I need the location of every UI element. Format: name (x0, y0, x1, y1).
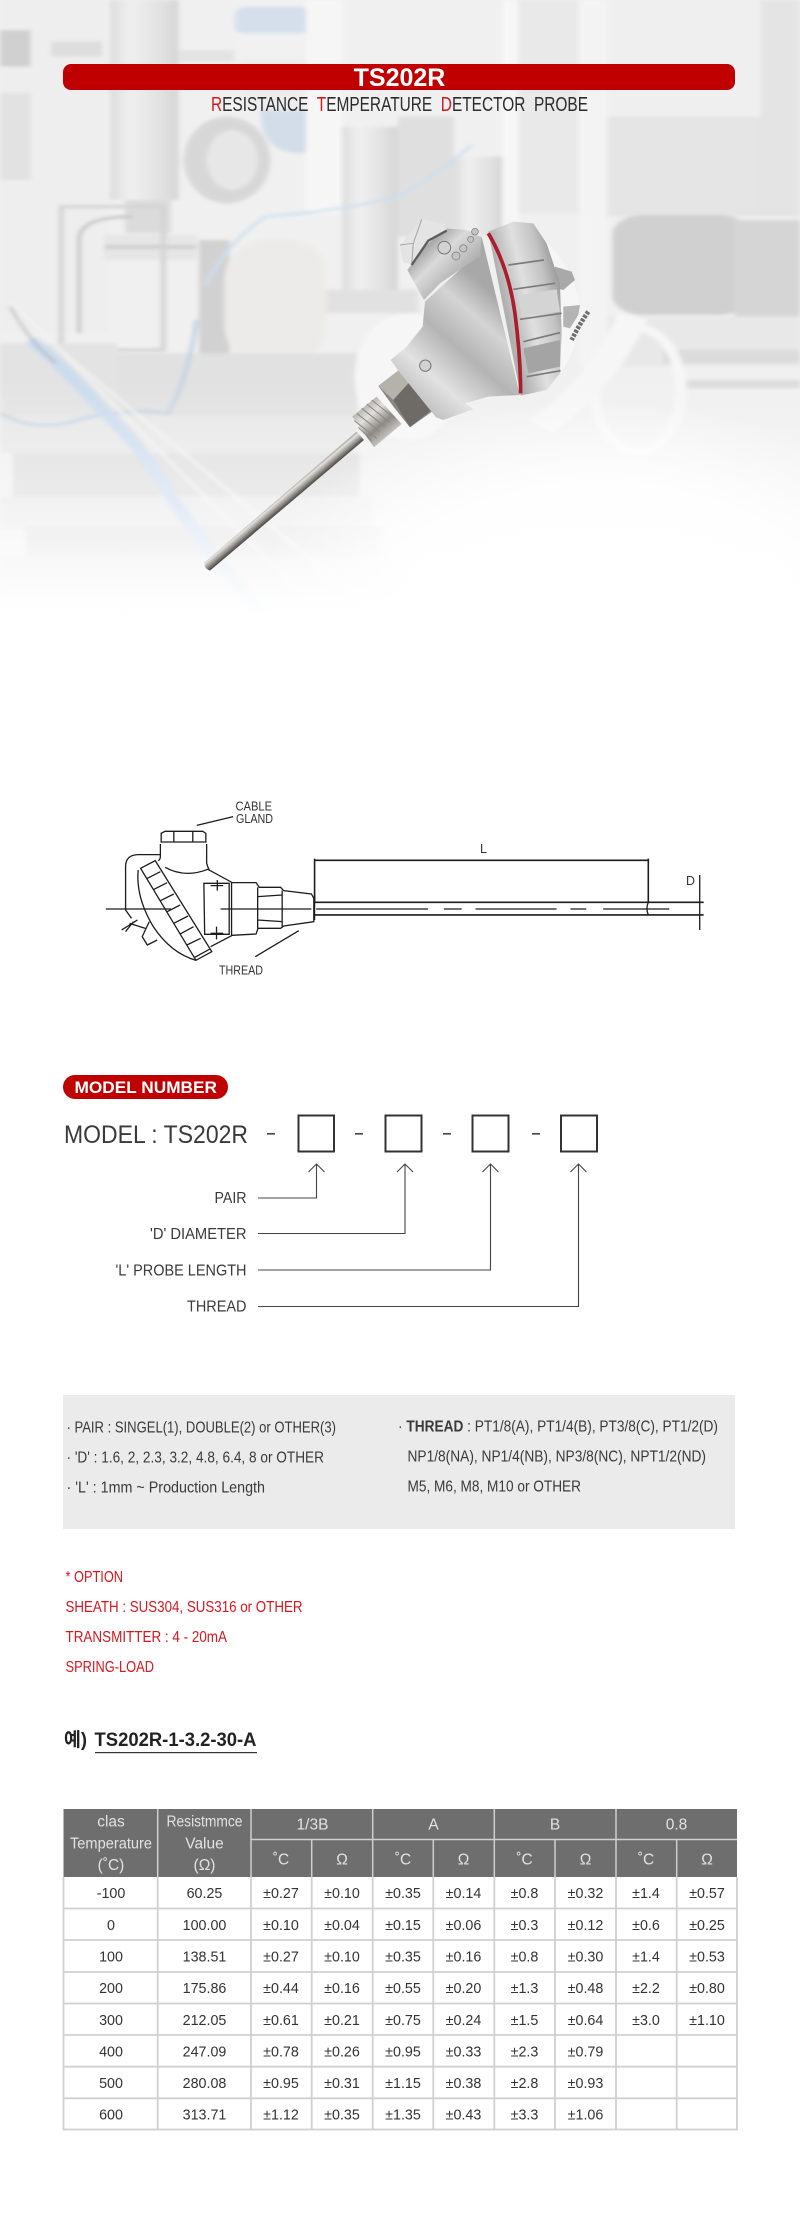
table header: A (428, 1816, 439, 1834)
option notes: TRANSMITTER : 4 - 20mA (66, 1629, 227, 1646)
red o-ring (488, 233, 521, 393)
option notes: * OPTION (66, 1569, 123, 1586)
white dome and terminal tabs (530, 237, 588, 380)
row 0: ±0.04 (324, 1918, 360, 1934)
row -100: ±0.8 (511, 1886, 538, 1902)
row 0: ±0.10 (263, 1918, 299, 1934)
row 400: ±2.3 (511, 2044, 538, 2060)
option notes: SPRING-LOAD (66, 1659, 154, 1676)
arrow: probe length (258, 1164, 498, 1270)
row 100: 138.51 (183, 1950, 226, 1966)
table header: B (550, 1816, 560, 1834)
left codes: · 'D' : 1.6, 2, 2.3, 3.2, 4.8, 6.4, 8 or OTHER (66, 1450, 324, 1466)
row 200: ±0.44 (263, 1981, 299, 1997)
row 300: ±0.24 (446, 2013, 481, 2029)
row 600: ±1.12 (263, 2108, 299, 2124)
row 300: ±0.21 (324, 2013, 360, 2029)
row 300: ±3.0 (632, 2013, 660, 2029)
left codes: · 'L' : 1mm ~ Production Length (66, 1480, 265, 1496)
row 300: 300 (99, 2013, 123, 2029)
row -100: 60.25 (187, 1886, 222, 1902)
row 200: 175.86 (183, 1981, 226, 1997)
row 600: ±0.43 (446, 2108, 481, 2124)
row 500: ±1.15 (385, 2076, 421, 2092)
center line (106, 908, 669, 910)
drawing labels: D (686, 873, 695, 888)
thread codes: · THREAD : PT1/8(A), PT1/4(B), PT3/8(C), PT1/2(D) (398, 1418, 718, 1436)
row 100 (99, 1950, 725, 1966)
table header: ˚C (273, 1852, 289, 1868)
row -100: ±0.10 (324, 1886, 360, 1902)
housing outline (126, 855, 314, 960)
model code line: MODEL : TS202R (64, 1121, 248, 1149)
screws (211, 880, 223, 939)
row 400: ±0.78 (263, 2044, 299, 2060)
row 200 (99, 1981, 725, 1997)
row 100: ±0.10 (324, 1950, 360, 1966)
row 200: 200 (99, 1981, 123, 1997)
row 600: ±1.06 (568, 2108, 603, 2124)
drawing labels: L (480, 841, 487, 856)
row 100: ±0.27 (263, 1950, 299, 1966)
drawing labels: THREAD (219, 962, 263, 978)
drawing labels: CABLE (236, 798, 272, 814)
row 200: ±1.3 (511, 1981, 538, 1997)
row 100: ±0.35 (385, 1950, 421, 1966)
row 0: ±0.3 (511, 1918, 538, 1934)
row 400: ±0.95 (385, 2044, 421, 2060)
model field labels: THREAD (187, 1298, 246, 1316)
row 300: ±0.64 (568, 2013, 603, 2029)
example model number: 예) (64, 1729, 87, 1751)
row 400: 247.09 (183, 2044, 226, 2060)
table header: (Ω) (194, 1857, 215, 1874)
row 400: ±0.79 (568, 2044, 603, 2060)
example model number: TS202R-1-3.2-30-A (94, 1730, 257, 1751)
row -100: ±1.4 (632, 1886, 660, 1902)
dimension drawing (106, 798, 704, 978)
table header: Value (185, 1836, 224, 1852)
model field labels: 'L' PROBE LENGTH (116, 1262, 246, 1280)
hex nut (378, 371, 437, 427)
row 500: ±0.31 (324, 2076, 360, 2092)
row 500 (99, 2076, 603, 2092)
diameter dimension (699, 875, 701, 930)
left codes: · PAIR : SINGEL(1), DOUBLE(2) or OTHER(3) (66, 1420, 336, 1436)
row 500: ±2.8 (511, 2076, 538, 2092)
row 600: ±3.3 (511, 2108, 538, 2124)
row 300: ±1.5 (511, 2013, 538, 2029)
row 600 (99, 2108, 603, 2124)
table header: Temperature (70, 1836, 152, 1852)
row 500: ±0.95 (263, 2076, 299, 2092)
row 0: ±0.6 (632, 1918, 660, 1934)
row 500: 500 (99, 2076, 123, 2092)
row 300: 212.05 (183, 2013, 226, 2029)
screws (420, 241, 451, 371)
row 500: ±0.93 (568, 2076, 603, 2092)
product photo: RTD probe with head (204, 219, 588, 571)
chain beads (452, 228, 478, 260)
table header: Resistmmce (166, 1814, 242, 1830)
thread codes: NP1/8(NA), NP1/4(NB), NP3/8(NC), NPT1/2(ND) (408, 1448, 706, 1466)
title bar: TS202R (354, 64, 445, 92)
option notes: SHEATH : SUS304, SUS316 or OTHER (66, 1599, 302, 1616)
model field labels (116, 1190, 246, 1316)
cable gland (400, 219, 482, 300)
table header: Ω (701, 1852, 713, 1868)
probe sheath (315, 902, 704, 915)
arrow: pair (258, 1164, 324, 1198)
row 500: ±0.38 (446, 2076, 481, 2092)
hero background: factory photo (0, 0, 800, 780)
leaders (197, 817, 299, 957)
thread codes: M5, M6, M8, M10 or OTHER (408, 1478, 581, 1496)
row 200: ±0.20 (446, 1981, 481, 1997)
row 400: ±0.33 (446, 2044, 481, 2060)
table header: Ω (580, 1852, 591, 1868)
subtitle: RESISTANCE TEMPERATURE DETECTOR PROBE (211, 94, 588, 116)
row 300: ±0.75 (385, 2013, 421, 2029)
row 0: ±0.25 (689, 1918, 725, 1934)
row 200: ±0.16 (324, 1981, 360, 1997)
row 0: ±0.15 (385, 1918, 421, 1934)
sheath rod (204, 432, 364, 571)
row -100: ±0.32 (568, 1886, 603, 1902)
title bar (63, 64, 735, 92)
row 300 (99, 2013, 725, 2029)
model field labels: 'D' DIAMETER (150, 1226, 246, 1243)
drawing labels: GLAND (236, 811, 273, 826)
row 100: ±1.4 (632, 1950, 660, 1966)
thread codes (398, 1418, 718, 1496)
table header: ˚C (395, 1852, 411, 1868)
left codes (66, 1420, 336, 1496)
table header: Ω (336, 1852, 348, 1868)
row 100: ±0.8 (511, 1950, 538, 1966)
model number badge: MODEL NUMBER (74, 1078, 217, 1097)
row 400: 400 (99, 2044, 123, 2060)
model code line (64, 1116, 597, 1152)
row 0: ±0.06 (446, 1918, 481, 1934)
table header: clas (97, 1814, 125, 1830)
table header: 0.8 (666, 1816, 687, 1834)
option notes (66, 1569, 302, 1676)
row -100: ±0.57 (689, 1886, 725, 1902)
row 600: ±0.35 (324, 2108, 360, 2124)
table header: 1/3B (297, 1816, 328, 1834)
row 100: ±0.53 (689, 1950, 725, 1966)
row 0: 0 (107, 1918, 115, 1934)
table header: ˚C (638, 1852, 654, 1868)
drawing labels (219, 798, 695, 978)
row 500: 280.08 (183, 2076, 226, 2092)
row 600: 313.71 (183, 2108, 226, 2124)
row 100: ±0.30 (568, 1950, 603, 1966)
row 400 (99, 2044, 603, 2060)
length dimension (315, 859, 648, 902)
table header: Ω (458, 1852, 469, 1868)
row 0 (107, 1918, 725, 1934)
row 400: ±0.26 (324, 2044, 360, 2060)
table header (64, 1809, 737, 1877)
model field labels: PAIR (214, 1190, 246, 1207)
panel: option codes (63, 1395, 735, 1529)
row -100 (97, 1886, 725, 1902)
row 200: ±0.55 (385, 1981, 421, 1997)
gland head outline (158, 831, 209, 871)
arrow: diameter (258, 1164, 413, 1234)
ribbed cover (488, 222, 562, 396)
tolerance table (64, 1809, 737, 2130)
row -100: -100 (97, 1886, 125, 1902)
row 200: ±2.2 (632, 1981, 660, 1997)
lid ribs (141, 861, 212, 960)
table header: ˚C (516, 1852, 533, 1868)
row 200: ±0.80 (689, 1981, 725, 1997)
row -100: ±0.35 (385, 1886, 421, 1902)
row 300: ±1.10 (689, 2013, 725, 2029)
table header: (˚C) (98, 1857, 124, 1874)
row 600: ±1.35 (385, 2108, 421, 2124)
arrow: thread (258, 1164, 586, 1306)
row 300: ±0.61 (263, 2013, 299, 2029)
model number badge (63, 1075, 228, 1099)
row 600: 600 (99, 2108, 123, 2124)
row 100: 100 (99, 1950, 123, 1966)
row -100: ±0.14 (446, 1886, 481, 1902)
row 0: ±0.12 (568, 1918, 603, 1934)
terminal details (122, 920, 157, 945)
row -100: ±0.27 (263, 1886, 299, 1902)
threaded fitting (352, 397, 402, 447)
row 0: 100.00 (183, 1918, 226, 1934)
row 200: ±0.48 (568, 1981, 603, 1997)
row 100: ±0.16 (446, 1950, 481, 1966)
housing body (391, 237, 520, 420)
